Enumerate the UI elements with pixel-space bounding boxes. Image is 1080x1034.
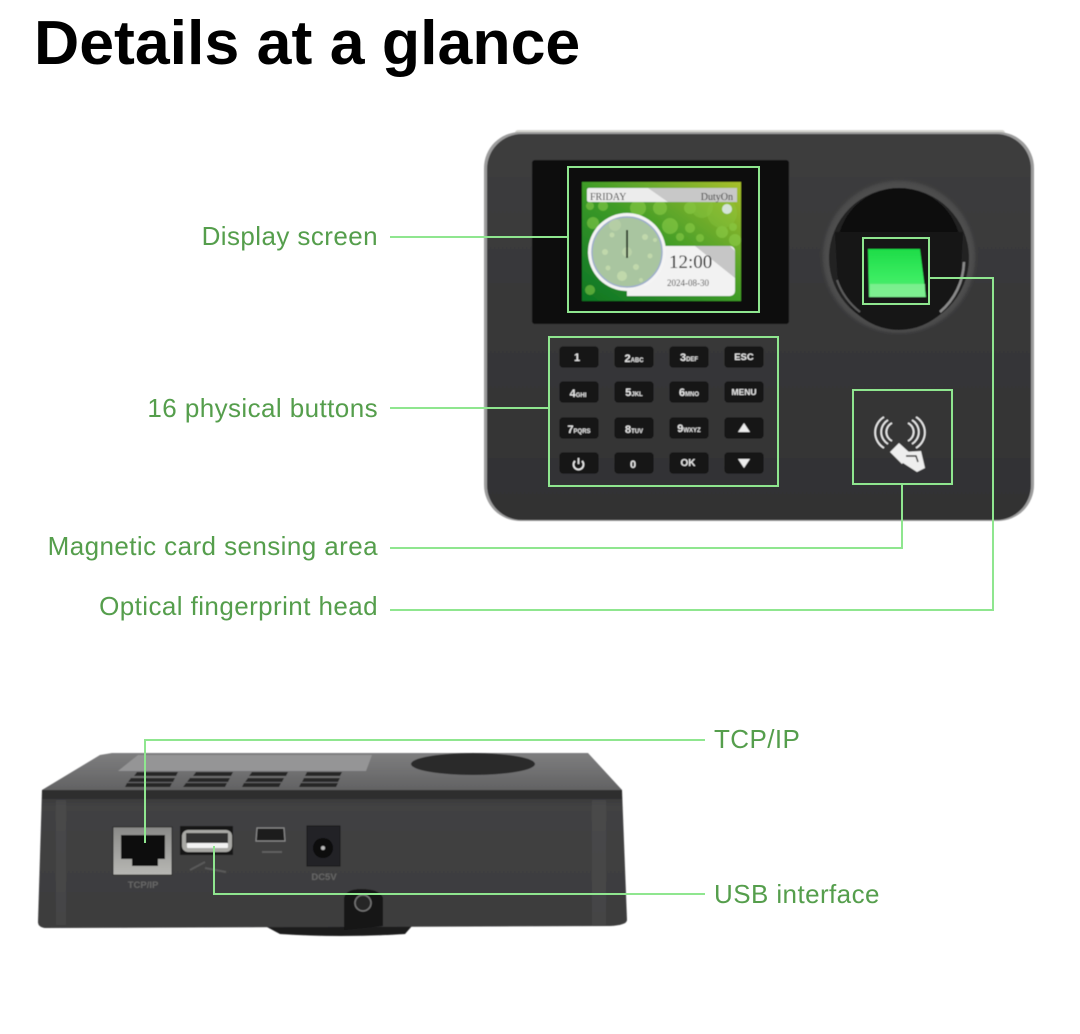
callout: display screen frame [390,167,759,312]
keypad: OK [680,458,696,469]
callout: fingerprint frame [390,238,993,610]
keypad: 9WXYZ [677,423,701,435]
fingerprint sensor [823,181,975,333]
display bezel and screen: FRIDAY [590,192,626,203]
label: TCP/IP: TCP/IP [714,724,800,754]
keypad: 8TUV [625,424,643,436]
keypad: 0 [630,459,636,471]
keypad: 2ABC [624,353,644,365]
keypad: 5JKL [625,387,643,399]
keypad: 7PQRS [567,424,591,436]
usb port [180,826,233,872]
callout: keypad frame [390,337,778,486]
ethernet port [113,827,172,891]
label: 16 physical buttons: 16 physical buttons [147,393,378,423]
side fingerprint well [411,753,535,775]
mounting bracket screw [344,889,383,930]
side LCD [118,755,372,771]
display bezel and screen: 12:00 [669,252,712,273]
label: display screen: Display screen [202,221,378,251]
RFID card icon [875,417,925,472]
label: magnetic card sensing area: Magnetic card sensing area [48,531,378,561]
title: Details at a glance [34,8,580,78]
base foot [265,926,412,936]
side keypad rows [125,772,342,787]
top surface [42,753,622,790]
label: optical fingerprint head: Optical fingerprint head [99,591,378,621]
device side view [38,753,627,936]
keypad [560,347,763,473]
device body [484,130,1034,521]
keypad: 1 [574,352,580,364]
callout: card area frame [390,390,952,548]
keypad: 3DEF [680,352,698,364]
keypad: MENU [731,387,757,397]
power jack: DC5V [311,872,337,883]
display bezel and screen [532,160,789,324]
ethernet port: TCP/IP [128,880,159,891]
callout: TCP/IP line [145,740,705,843]
labels [48,221,880,909]
label: USB interface: USB interface [714,879,880,909]
callout frames and leader lines [145,167,993,894]
display bezel and screen: 2024-08-30 [667,278,709,288]
keypad: 4GHI [570,388,587,400]
display bezel and screen: DutyOn [701,192,733,203]
callout: USB line [214,846,705,894]
device front view [484,130,1034,521]
keypad: ESC [734,352,754,363]
power jack [307,826,340,883]
keypad: 6MNO [679,387,699,399]
front face [38,790,627,928]
mini usb port [256,828,285,852]
